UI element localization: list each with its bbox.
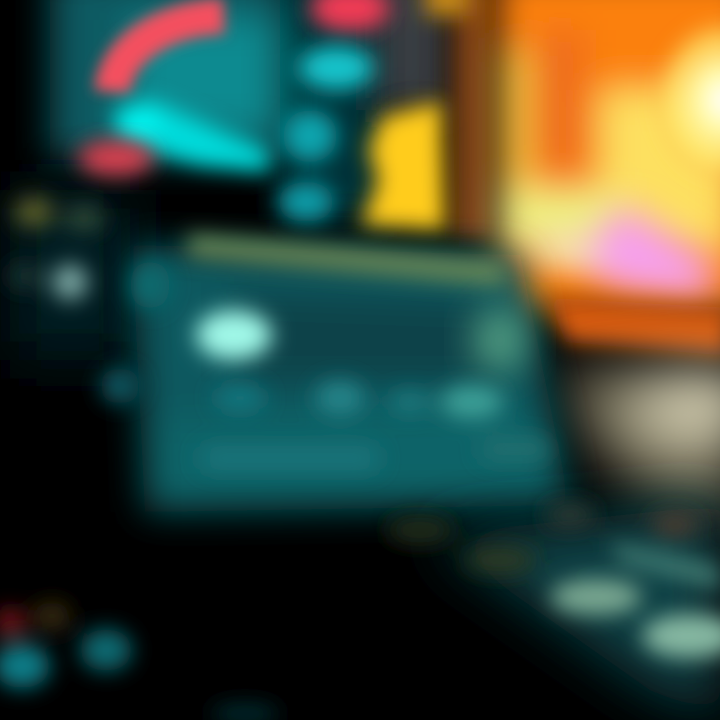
heading: olive text strip — [188, 234, 505, 286]
icon: sun glow — [648, 12, 720, 188]
panel: orange lower sill — [548, 298, 720, 356]
panel: left dark sidebar — [10, 190, 130, 360]
icons: keyboard keys — [386, 503, 720, 658]
panel: central teal card — [132, 245, 570, 512]
icons: bottom left dots — [0, 602, 279, 720]
panel: brown window frame — [452, 0, 492, 240]
chart: top red marker — [310, 0, 390, 32]
icons: left sidebar dots — [9, 197, 170, 404]
chart: cyan highlight band — [112, 100, 270, 172]
shape: pink glow — [531, 205, 712, 300]
icons: teal dots column — [278, 46, 374, 222]
shape: green right edge of card — [472, 306, 528, 374]
panel: orange window — [496, 0, 720, 310]
chart: red arc — [112, 16, 224, 92]
text block: blurred card rows — [200, 381, 550, 470]
callout: bright mint blob — [196, 310, 272, 360]
panel: keyboard shadow area — [430, 505, 720, 720]
panel: yellow tile — [360, 0, 470, 232]
panel: beige surface — [560, 362, 720, 510]
panel: upper teal screen — [50, 0, 450, 220]
chart: red lower bar — [78, 140, 154, 176]
